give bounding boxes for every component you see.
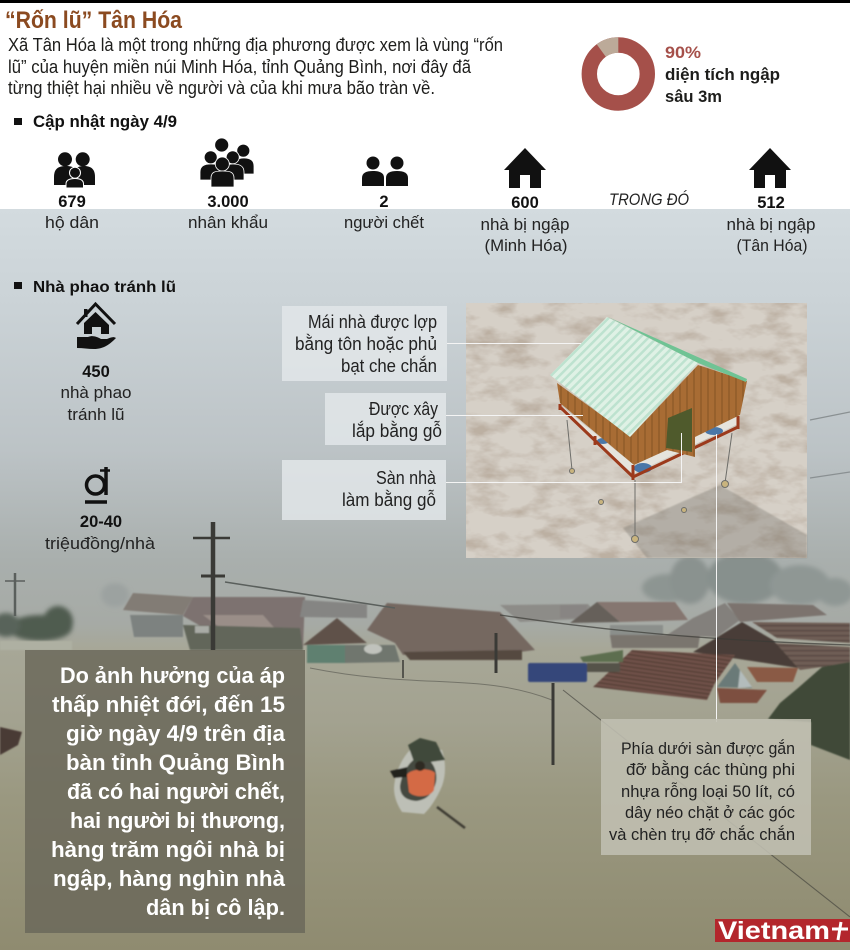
white gap under floor <box>560 405 740 474</box>
icon: house <box>504 148 546 188</box>
donut caption: 90% <box>665 43 701 62</box>
stat: 450 shelters: 450 <box>82 363 110 381</box>
door <box>666 408 692 452</box>
callout: barrels under the floor: Phía dưới sàn được gắn <box>621 739 795 758</box>
text panel: storm summary: Do ảnh hưởng của áp <box>60 663 285 688</box>
icon: crowd <box>200 138 254 187</box>
top bar <box>0 0 850 3</box>
stat: flooded houses Minh Hóa: (Minh Hóa) <box>484 236 568 255</box>
callout: floor: Sàn nhà <box>376 468 437 488</box>
stat: flooded houses Tân Hóa: (Tân Hóa) <box>736 236 808 255</box>
intro text <box>8 35 503 98</box>
callout: roof: bằng tôn hoặc phủ <box>295 333 437 354</box>
stat: households: hộ dân <box>45 213 99 232</box>
donut chart: 90% <box>589 37 647 103</box>
logo: Vietnam+: Vietnam <box>718 917 830 945</box>
icon: two people <box>362 156 408 186</box>
stat: flooded houses Minh Hóa: 600 <box>511 194 539 212</box>
icon: family <box>54 152 95 188</box>
section heading: flood shelter: Nhà phao tránh lũ <box>33 279 176 296</box>
ground texture <box>466 303 807 558</box>
text panel: storm summary: thấp nhiệt đới, đến 15 <box>52 692 285 717</box>
intro text: từng thiệt hại nhiều về người và của khi mưa bão tràn về. <box>8 78 435 98</box>
callout: barrels under the floor: dây néo chặt ở các góc <box>625 803 795 822</box>
shadow <box>623 485 807 558</box>
donut caption: sâu 3m <box>665 87 722 106</box>
back roof <box>608 317 747 382</box>
stat: cost per house: 20-40 <box>80 513 122 531</box>
boat <box>390 738 465 828</box>
callout: barrels under the floor <box>601 719 811 855</box>
stat: population: 3.000 <box>207 193 249 211</box>
stat: deaths <box>344 156 424 232</box>
callout: barrels under the floor: nhựa rỗng loại 50 lít, có <box>621 782 795 801</box>
callout leader lines <box>446 344 716 722</box>
house illustration <box>466 303 807 558</box>
stat: population <box>188 138 268 232</box>
intro text: lũ” của huyện miền núi Minh Hóa, tỉnh Quảng Bình, nơi đây đã <box>8 57 472 77</box>
stat: flooded houses Minh Hóa: nhà bị ngập <box>480 215 570 234</box>
stat: flooded houses Minh Hóa <box>480 148 570 255</box>
text panel: storm summary: bàn tỉnh Quảng Bình <box>66 750 285 775</box>
stat: flooded houses Tân Hóa: 512 <box>757 194 785 212</box>
stat: households: 679 <box>58 193 86 211</box>
stat: cost per house <box>45 467 156 553</box>
icon: house <box>749 148 791 188</box>
icon: dong sign <box>85 467 110 502</box>
stat: flooded houses Tân Hóa: nhà bị ngập <box>726 215 816 234</box>
text panel: storm summary: giờ ngày 4/9 trên địa <box>66 721 285 746</box>
background flood photo <box>0 209 850 950</box>
title: “Rốn lũ” Tân Hóa <box>5 7 183 34</box>
stat: 450 shelters: nhà phao <box>60 383 132 402</box>
stat: 450 shelters <box>60 304 132 424</box>
intro text: Xã Tân Hóa là một trong những địa phương được xem là vùng “rốn <box>8 35 503 55</box>
stat: 450 shelters: tránh lũ <box>68 405 124 424</box>
stat: deaths: người chết <box>344 213 424 232</box>
donut caption: diện tích ngập <box>665 65 780 84</box>
text panel: storm summary <box>25 650 305 933</box>
callout: wood walls: lắp bằng gỗ <box>352 420 442 441</box>
text panel: storm summary: ngập, hàng nghìn nhà <box>53 866 285 891</box>
donut caption <box>665 43 780 106</box>
callout: floor: làm bằng gỗ <box>342 489 436 510</box>
blue barrels <box>597 427 723 473</box>
stat: deaths: 2 <box>379 193 389 211</box>
text panel: storm summary: đã có hai người chết, <box>67 779 285 804</box>
section heading: update: Cập nhật ngày 4/9 <box>33 112 177 131</box>
text panel: storm summary: dân bị cô lập. <box>146 895 285 920</box>
stilts and anchors <box>567 420 732 542</box>
text panel: storm summary: hàng trăm ngôi nhà bị <box>51 837 285 862</box>
callout: wood walls: Được xây <box>369 399 438 419</box>
stat: households <box>45 152 99 232</box>
callout: roof: Mái nhà được lợp <box>308 312 437 332</box>
callout: roof <box>282 306 447 381</box>
stat: cost per house: triệuđồng/nhà <box>45 534 156 553</box>
callout: barrels under the floor: đỡ bằng các thùng phi <box>626 760 795 779</box>
front wall <box>630 365 747 465</box>
floor frame <box>560 404 738 480</box>
stat: flooded houses Tân Hóa <box>726 148 816 255</box>
callout: roof: bạt che chắn <box>341 355 437 376</box>
callout: floor <box>282 460 446 520</box>
callout: barrels under the floor: và chèn trụ đỡ chắc chắn <box>609 825 795 844</box>
front roof <box>550 317 698 437</box>
icon: house on hand <box>77 304 116 349</box>
stat: population: nhân khẩu <box>188 213 268 232</box>
text panel: storm summary: hai người bị thương, <box>70 808 285 833</box>
label: of which: TRONG ĐÓ <box>609 190 689 209</box>
left wall <box>557 383 634 465</box>
callout: wood walls <box>325 393 446 445</box>
